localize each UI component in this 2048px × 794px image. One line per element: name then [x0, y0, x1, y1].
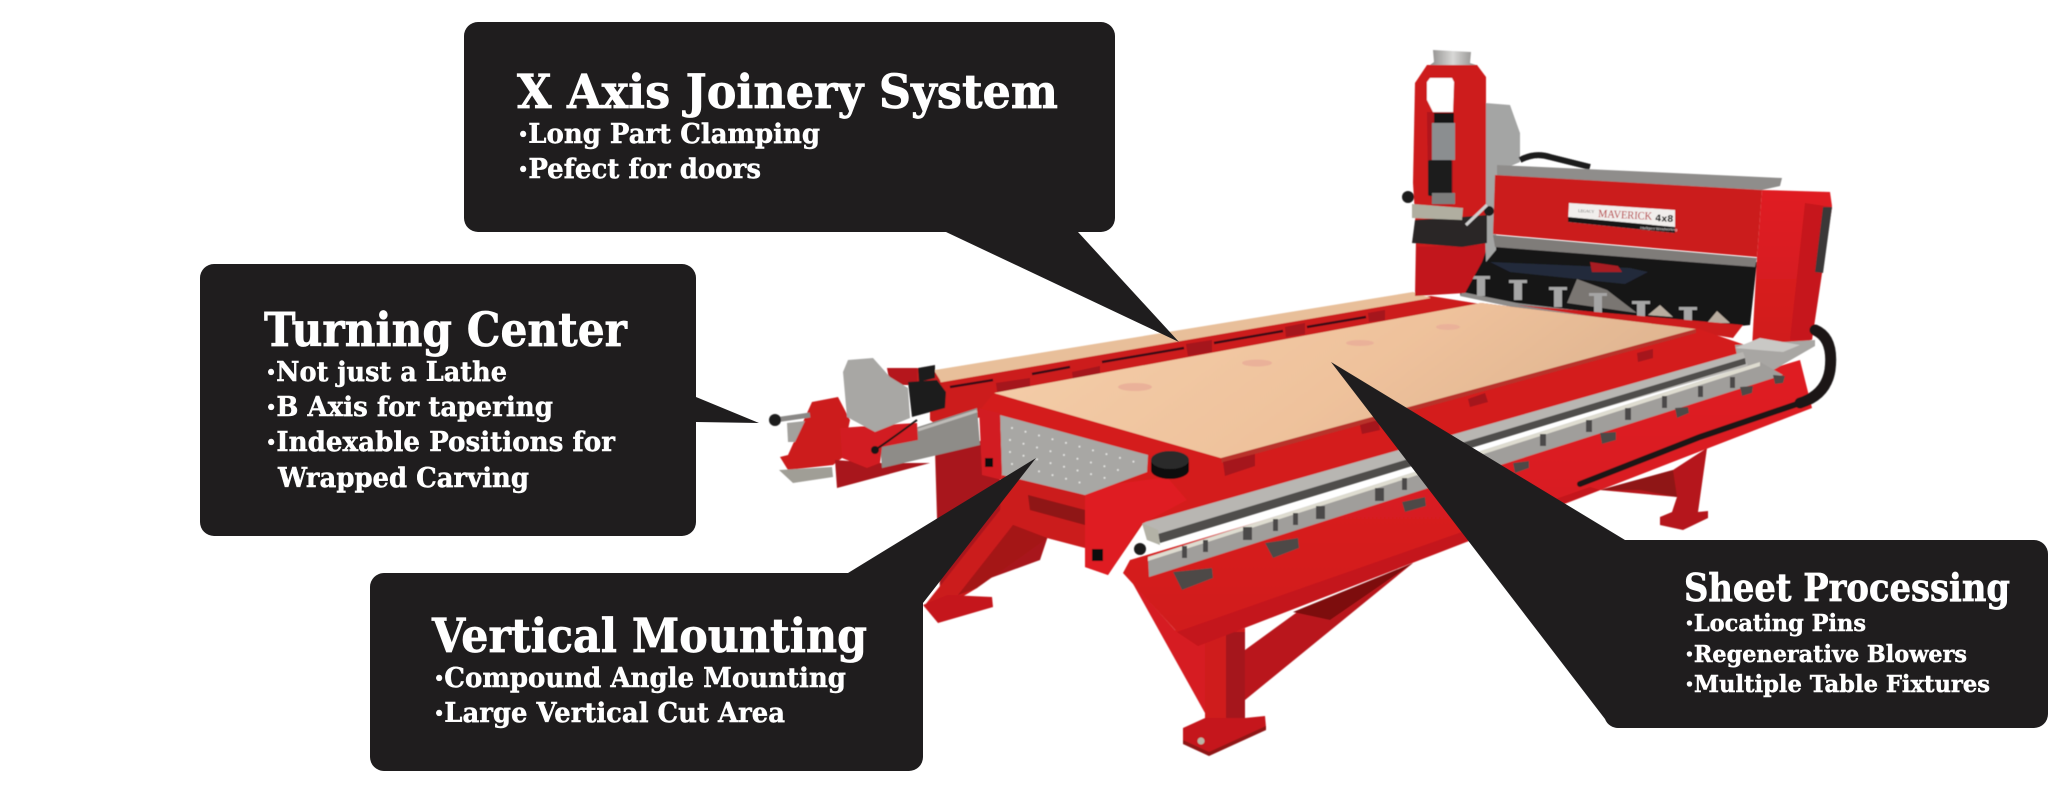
vertical mount red post	[979, 408, 1002, 480]
speech bubble	[464, 22, 1179, 342]
heading: Vertical Mounting	[431, 609, 867, 664]
rail assembly	[1134, 352, 1783, 577]
bullet: B axis: •B Axis for tapering	[266, 392, 553, 423]
perforated vertical plate	[1000, 415, 1148, 495]
callout: Sheet Processing	[1331, 362, 2048, 728]
heading: Turning Center	[264, 303, 628, 358]
gantry beam	[1493, 175, 1762, 257]
rail slots	[1182, 377, 1735, 558]
main beam and legs	[1123, 360, 1812, 756]
callout: Vertical Mounting	[370, 458, 1036, 771]
cutout slot	[1028, 495, 1085, 525]
Maverick nameplate: 4x8	[1655, 214, 1674, 225]
CNC machine photo illustration	[769, 50, 1832, 756]
main table frame	[980, 328, 1745, 575]
main MDF table	[994, 303, 1696, 463]
cable carrier on top of gantry	[1520, 155, 1590, 167]
bullet: long part clamping: •Long Part Clamping	[518, 119, 820, 150]
speech bubble	[200, 264, 759, 536]
table holes	[1118, 324, 1460, 391]
silver back plate	[1480, 100, 1520, 262]
rail clamps	[1173, 375, 1785, 590]
Maverick nameplate	[1568, 203, 1677, 233]
black table knob	[1151, 451, 1189, 479]
gantry interior with clamps	[1460, 240, 1757, 338]
gantry top linear rail	[1497, 165, 1782, 190]
Maverick nameplate: Intelligent Woodworking	[1640, 226, 1677, 232]
cable chain lower run	[1580, 403, 1800, 484]
column base	[1415, 240, 1490, 296]
cable chain loop	[1800, 330, 1831, 403]
Maverick nameplate: MAVERICK	[1598, 208, 1652, 223]
bullet: perfect for doors: •Pefect for doors	[518, 154, 761, 185]
rear support leg	[1600, 448, 1708, 530]
front block port	[1092, 549, 1103, 561]
Z-axis brush and clamp	[1402, 191, 1494, 247]
bullet: multiple table fixtures: •Multiple Table Fixtures	[1685, 671, 1990, 698]
gantry right end housing	[1752, 190, 1832, 350]
vertical side foot	[923, 595, 993, 623]
speech bubble	[370, 458, 1036, 771]
callout: Turning Center	[200, 264, 759, 536]
head column	[1413, 50, 1486, 247]
gantry foot plate	[1735, 338, 1800, 352]
heading: Sheet Processing	[1684, 565, 2010, 610]
bullet: regenerative blowers: •Regenerative Blowers	[1685, 641, 1967, 668]
vertical mount red underside	[925, 475, 1085, 605]
bullet: not just a lathe: •Not just a Lathe	[266, 357, 507, 388]
gantry lower linear rail	[1493, 235, 1757, 267]
heading: X Axis Joinery System	[517, 65, 1058, 120]
table edge brackets	[1223, 349, 1653, 476]
left rear pillar	[935, 440, 1050, 590]
bullet: large vertical cut area: •Large Vertical Cut Area	[434, 698, 785, 729]
front end block	[1085, 477, 1187, 575]
rear silver mounting plate	[1735, 340, 1815, 372]
bullet: indexable positions: •Indexable Positions for	[266, 427, 616, 458]
Maverick nameplate: LEGACY	[1578, 208, 1595, 214]
vertical leg brace	[958, 525, 1047, 595]
callout: X Axis Joinery System	[464, 22, 1179, 342]
bullet continuation: wrapped carving: Wrapped Carving	[277, 463, 529, 494]
rear rail with MDF strip	[930, 292, 1480, 428]
bullet: compound angle: •Compound Angle Mounting	[434, 663, 846, 694]
bullet: locating pins: •Locating Pins	[1685, 610, 1866, 637]
turning centre assembly	[769, 358, 980, 488]
speech bubble	[1331, 362, 2048, 728]
